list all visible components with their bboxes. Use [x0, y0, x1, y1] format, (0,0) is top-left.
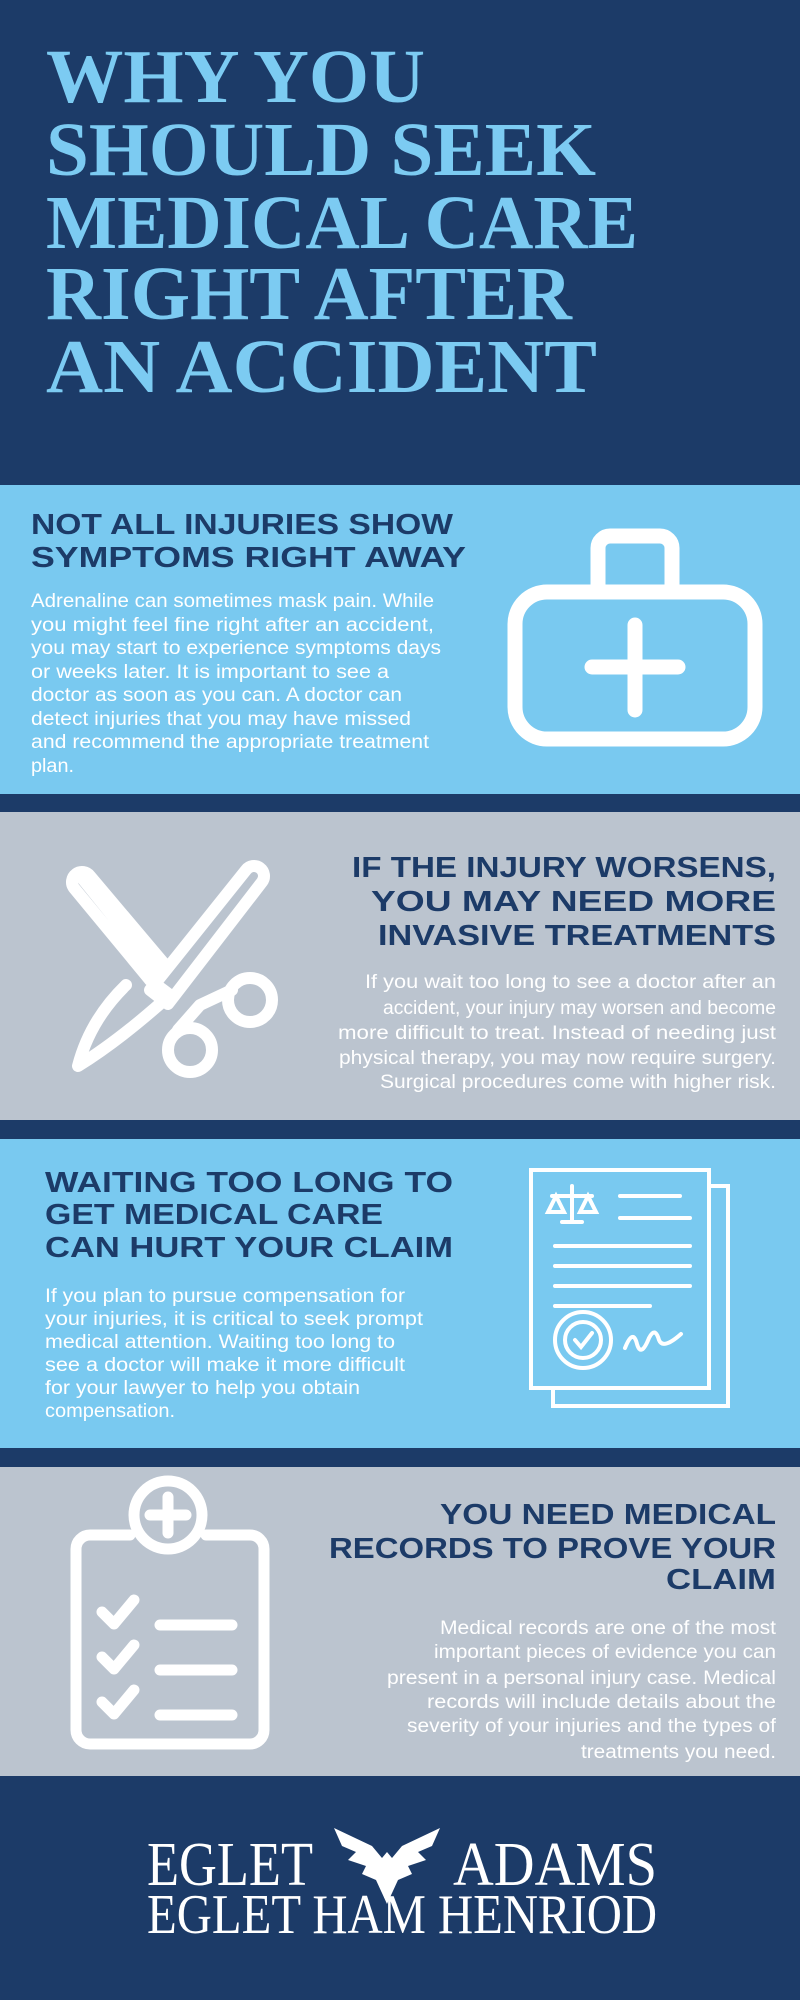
text block: evidence: severity of your injuries and the types of [407, 1716, 777, 1737]
heading: injury worsens: YOU MAY NEED MORE [371, 886, 776, 918]
heading: medical records: RECORDS TO PROVE YOUR [329, 1533, 776, 1565]
text block: adrenaline: doctor as soon as you can. A doctor can [31, 685, 402, 706]
text block: wait too long [338, 972, 777, 1093]
text block: evidence: Medical records are one of the most [440, 1618, 777, 1639]
text block: adrenaline: you may start to experience symptoms days [31, 638, 441, 659]
heading: medical records: YOU NEED MEDICAL [440, 1499, 776, 1531]
text block: adrenaline: and recommend the appropriate treatment [31, 732, 430, 753]
title [46, 35, 638, 409]
heading: not all injuries [31, 509, 466, 574]
panel: not all injuries show symptoms [0, 485, 800, 794]
title: SHOULD SEEK [46, 108, 596, 192]
icon: medical kit [515, 536, 755, 739]
text block: wait too long: If you wait too long to see a doctor after an [365, 972, 776, 993]
text block: adrenaline: you might feel fine right after an accident, [31, 615, 434, 636]
text block: adrenaline [31, 591, 441, 777]
text block: compensation: for your lawyer to help you obtain [45, 1378, 360, 1399]
icon: clipboard checklist [76, 1481, 264, 1744]
heading: waiting too long: GET MEDICAL CARE [45, 1199, 383, 1231]
text block: wait too long: more difficult to treat. Instead of needing just [338, 1023, 777, 1044]
text block: evidence: important pieces of evidence you can [434, 1642, 776, 1663]
heading: not all injuries: SYMPTOMS RIGHT AWAY [31, 542, 466, 574]
text block: compensation: see a doctor will make it more difficult [45, 1355, 406, 1376]
heading: waiting too long [45, 1167, 453, 1264]
heading: medical records: CLAIM [666, 1564, 776, 1596]
text block: evidence: present in a personal injury case. Medical [387, 1668, 776, 1689]
icon: scalpel and scissors [72, 866, 272, 1072]
text block: compensation: medical attention. Waiting too long to [45, 1332, 395, 1353]
panel: hurt your claim [0, 1139, 800, 1448]
icon: eagle [334, 1828, 440, 1904]
heading: injury worsens [352, 852, 776, 952]
footer logo: EGLET [147, 1831, 313, 1899]
text block: wait too long: accident, your injury may worsen and become [383, 998, 776, 1019]
text block: adrenaline: detect injuries that you may have missed [31, 709, 411, 730]
title: MEDICAL CARE [46, 181, 638, 265]
text block: evidence [387, 1618, 777, 1763]
heading: injury worsens: INVASIVE TREATMENTS [378, 920, 776, 952]
panel: medical records [0, 1467, 800, 1776]
title: RIGHT AFTER [46, 252, 573, 336]
heading: waiting too long: CAN HURT YOUR CLAIM [45, 1232, 453, 1264]
panel: injury worsens [0, 812, 800, 1120]
footer logo: ADAMS [453, 1831, 657, 1899]
text block: wait too long: Surgical procedures come with higher risk. [380, 1072, 776, 1093]
footer logo [147, 1828, 657, 1946]
heading: injury worsens: IF THE INJURY WORSENS, [352, 852, 776, 884]
text block: adrenaline: Adrenaline can sometimes mask pain. While [31, 591, 434, 612]
title: AN ACCIDENT [46, 325, 597, 409]
text block: compensation: If you plan to pursue compensation for [45, 1286, 406, 1307]
text block: compensation: compensation. [45, 1401, 175, 1422]
title: WHY YOU [46, 35, 425, 119]
heading: waiting too long: WAITING TOO LONG TO [45, 1167, 453, 1199]
text block: evidence: treatments you need. [581, 1742, 776, 1763]
text block: evidence: records will include details about the [427, 1692, 776, 1713]
heading: not all injuries: NOT ALL INJURIES SHOW [31, 509, 454, 541]
text block: wait too long: physical therapy, you may now require surgery. [339, 1048, 776, 1069]
text block: compensation [45, 1286, 424, 1422]
text block: compensation: your injuries, it is critical to seek prompt [45, 1309, 424, 1330]
footer logo: EGLET HAM HENRIOD [147, 1884, 657, 1946]
text block: adrenaline: or weeks later. It is important to see a [31, 662, 389, 683]
icon: legal document [531, 1170, 728, 1406]
text block: adrenaline: plan. [31, 756, 74, 777]
heading: medical records [329, 1499, 776, 1596]
